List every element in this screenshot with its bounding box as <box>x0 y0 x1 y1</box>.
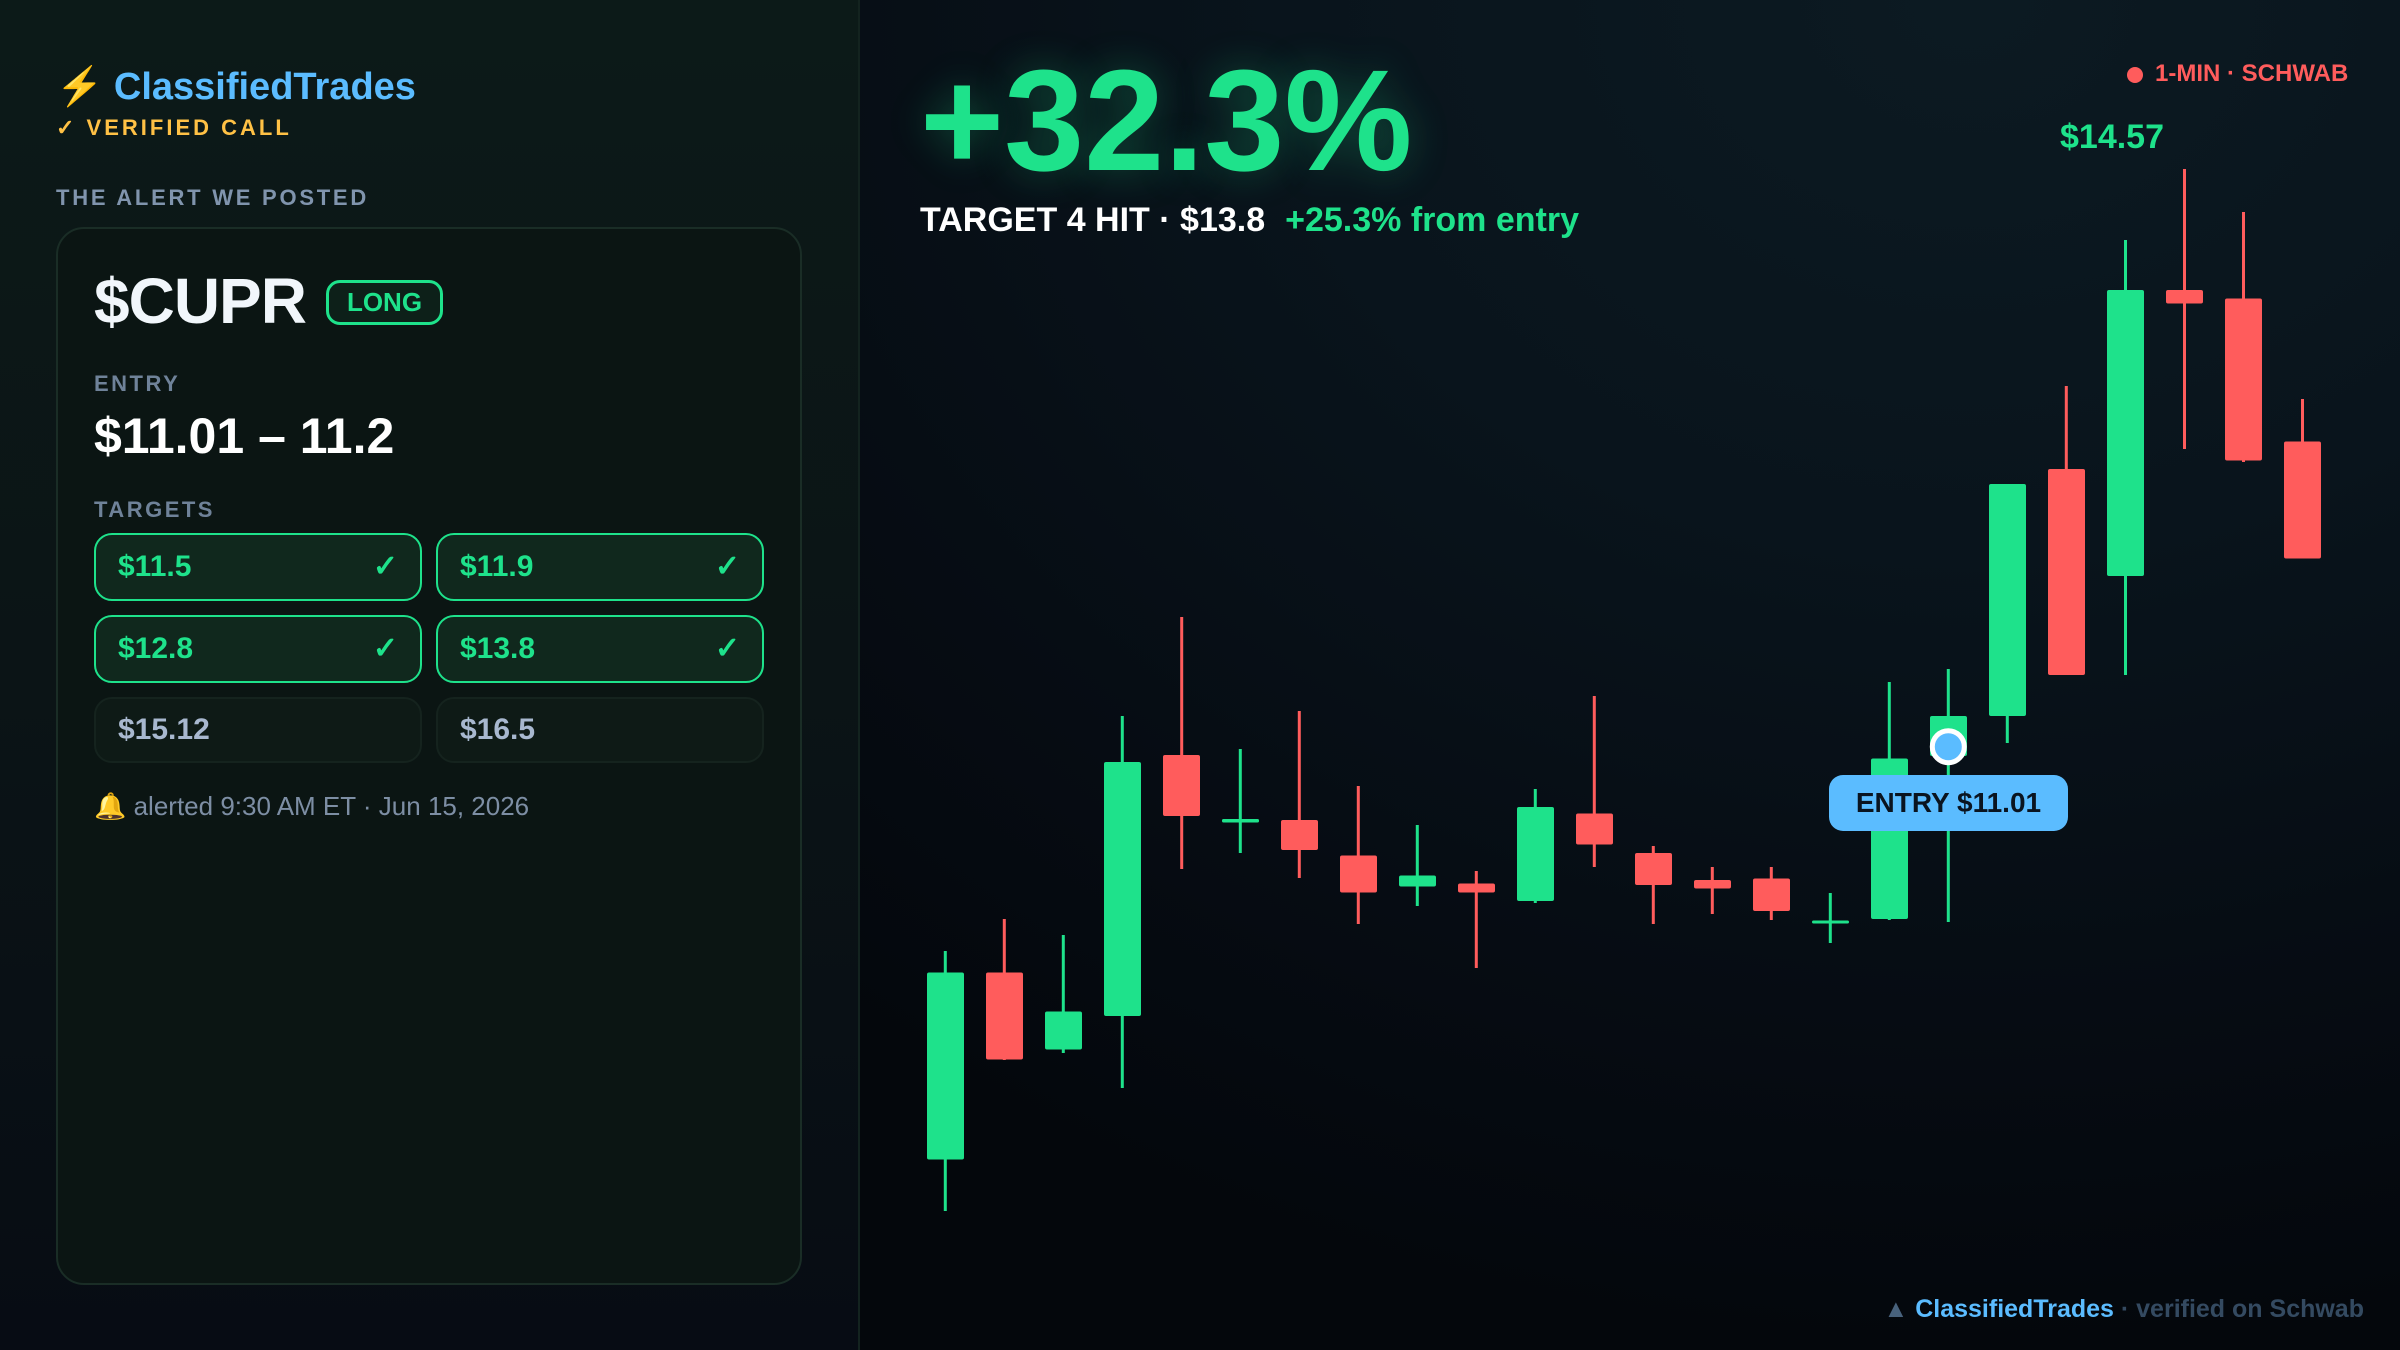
target chip 11.9 <box>436 533 764 601</box>
target chip 13.8 <box>436 615 764 683</box>
value: entry range: $11.01 – 11.2 <box>94 408 394 464</box>
logo: ClassifiedTrades: ⚡ ClassifiedTrades <box>56 66 416 108</box>
badge: long <box>326 280 443 325</box>
target chip 11.5: $11.5 <box>118 550 191 583</box>
panel: chart background <box>860 0 2400 1350</box>
ticker: $CUPR: $CUPR <box>94 265 306 337</box>
card: alert details <box>56 227 802 1285</box>
target chip 15.12 <box>94 697 422 763</box>
label: targets: TARGETS <box>94 497 215 522</box>
target chip 11.9: $11.9 <box>460 550 533 583</box>
target chip 13.8: ✓ <box>715 632 740 665</box>
headline: gain percent: +32.3% <box>920 40 1412 201</box>
target chip 12.8: ✓ <box>373 632 398 665</box>
entry price callout <box>1829 775 2068 831</box>
badge: long: LONG <box>347 287 422 317</box>
live tag: 1-min schwab: 1-MIN · SCHWAB <box>2155 60 2348 87</box>
target chip 12.8: $12.8 <box>118 632 193 665</box>
target chip 11.9: ✓ <box>715 550 740 583</box>
footer: verified on schwab: ▲ ClassifiedTrades · verified on Schwab <box>1884 1295 2364 1323</box>
target chip 16.5 <box>436 697 764 763</box>
subheading: target hit: TARGET 4 HIT · $13.8 +25.3% from entry <box>920 201 1579 239</box>
target chip 11.5: ✓ <box>373 550 398 583</box>
alert timestamp: 🔔 alerted 9:30 AM ET · Jun 15, 2026 <box>94 791 529 821</box>
high price label: $14.57 <box>2060 118 2164 156</box>
target chip 16.5: $16.5 <box>460 713 535 746</box>
target chip 12.8 <box>94 615 422 683</box>
entry marker dot <box>1932 731 1964 763</box>
heading: the alert we posted: THE ALERT WE POSTED <box>56 185 369 210</box>
badge: verified call: ✓ VERIFIED CALL <box>56 115 292 140</box>
entry price callout: ENTRY $11.01 <box>1856 787 2041 818</box>
label: entry: ENTRY <box>94 371 180 396</box>
target chip 13.8: $13.8 <box>460 632 535 665</box>
panel: alert sidebar <box>0 0 860 1350</box>
target chip 11.5 <box>94 533 422 601</box>
target chip 15.12: $15.12 <box>118 713 210 746</box>
